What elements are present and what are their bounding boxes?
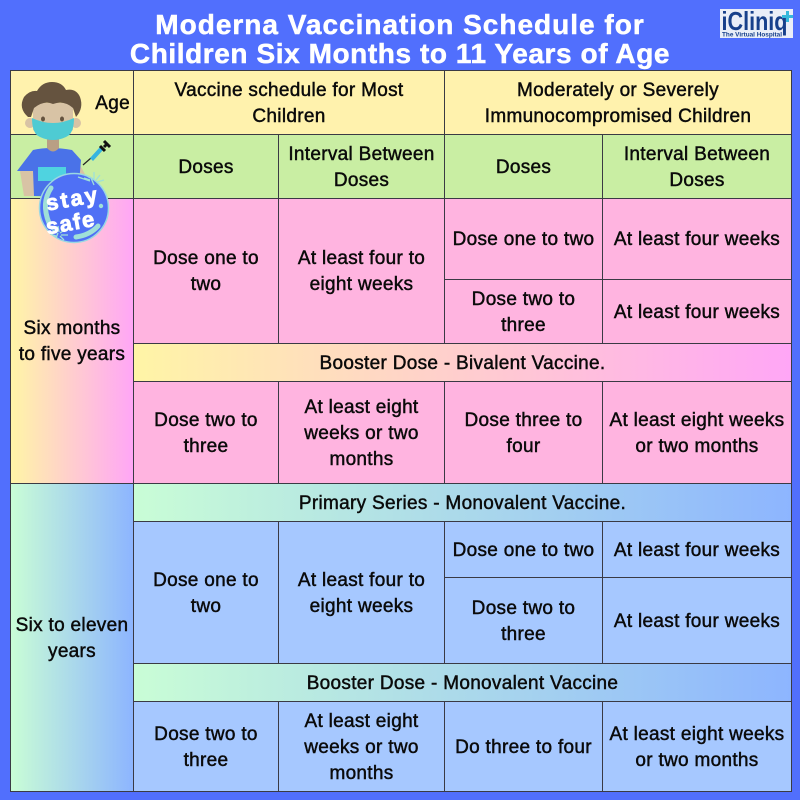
cell: eight weeks: At least eight weeks bbox=[610, 724, 784, 744]
age label: six months to five years: to five years bbox=[19, 344, 125, 365]
cell: eight weeks: weeks or two bbox=[304, 736, 419, 758]
cell: dose one to two: two bbox=[191, 596, 221, 616]
cell: eight weeks: weeks or two bbox=[304, 422, 419, 444]
cell: four to eight weeks bbox=[278, 521, 445, 664]
cell: eight weeks bbox=[602, 381, 792, 484]
cell: four weeks: At least four weeks bbox=[614, 610, 780, 632]
band: primary series: Primary Series - Monovalent Vaccine. bbox=[299, 492, 626, 514]
cell: dose one to two: two bbox=[191, 274, 221, 295]
age label: six months to five years: Six months bbox=[24, 318, 120, 339]
cell: dose two to three, immunocompromised bbox=[444, 279, 603, 344]
cell: dose one to two, immunocompromised: Dose one to two bbox=[453, 540, 594, 560]
header: most children bbox=[133, 70, 445, 135]
subheader: interval immunocompromised bbox=[602, 134, 792, 199]
cell: dose two to three, immunocompromised: Dose two to bbox=[472, 288, 575, 310]
header: age bbox=[10, 70, 134, 135]
cell: four to eight weeks: eight weeks bbox=[310, 596, 413, 616]
cell: eight weeks: or two months bbox=[635, 436, 759, 456]
age label: six months to five years bbox=[10, 198, 134, 484]
cell: four to eight weeks: eight weeks bbox=[310, 274, 413, 295]
cell: dose two to three: three bbox=[184, 750, 228, 770]
header: immunocompromised children bbox=[444, 70, 792, 135]
age label: six to eleven years bbox=[10, 483, 134, 792]
cell: dose three to four: four bbox=[507, 436, 540, 456]
cell: dose two to three: Dose two to bbox=[154, 724, 258, 744]
subheader: doses bbox=[133, 134, 279, 199]
cell: eight weeks: or two months bbox=[635, 750, 759, 770]
subheader: interval: Interval Between bbox=[288, 144, 435, 164]
cell: four weeks: At least four weeks bbox=[614, 302, 780, 322]
cell: four weeks: At least four weeks bbox=[614, 540, 780, 560]
cell: dose one to two: Dose one to bbox=[153, 248, 259, 269]
age label: six to eleven years: Six to eleven bbox=[16, 614, 128, 636]
cell: dose one to two, immunocompromised bbox=[444, 521, 603, 578]
icon: stay safe badge: safe bbox=[44, 206, 98, 239]
band: booster bivalent bbox=[133, 343, 792, 382]
cell: dose three to four: Dose three to bbox=[465, 410, 582, 430]
cell: dose two to three, immunocompromised: three bbox=[501, 314, 546, 336]
cell: eight weeks: months bbox=[329, 448, 394, 470]
band: primary series bbox=[133, 483, 792, 522]
cell: eight weeks bbox=[278, 381, 445, 484]
band: booster monovalent bbox=[133, 663, 792, 702]
cell: dose two to three, immunocompromised: three bbox=[501, 624, 546, 644]
icon: child bbox=[17, 82, 87, 197]
cell: four weeks bbox=[602, 577, 792, 664]
cell: eight weeks bbox=[278, 701, 445, 792]
cell: dose one to two: Dose one to bbox=[153, 570, 259, 590]
cell: dose two to three, immunocompromised: Dose two to bbox=[472, 598, 575, 618]
age label: six to eleven years: years bbox=[48, 640, 96, 662]
cell: do three to four bbox=[444, 701, 603, 792]
cell: eight weeks: At least eight bbox=[304, 710, 419, 732]
illustration: child with mask, syringe and stay safe badge bbox=[17, 82, 111, 244]
subheader: doses immunocompromised bbox=[444, 134, 603, 199]
subheader: interval bbox=[278, 134, 445, 199]
icon: stay safe badge bbox=[40, 172, 108, 242]
cell: dose two to three bbox=[133, 701, 279, 792]
subheader: interval immunocompromised: Doses bbox=[669, 170, 725, 190]
cell: four weeks: At least four weeks bbox=[614, 229, 780, 250]
cell: eight weeks: At least eight weeks bbox=[610, 410, 784, 430]
blank green header cell bbox=[10, 134, 134, 199]
cell: dose one to two, immunocompromised bbox=[444, 198, 603, 280]
band: booster bivalent: Booster Dose - Bivalent Vaccine. bbox=[320, 352, 605, 374]
band: booster monovalent: Booster Dose - Monovalent Vaccine bbox=[307, 672, 618, 694]
subheader: doses: Doses bbox=[178, 156, 234, 178]
header: most children: Children bbox=[252, 106, 326, 126]
icon: stay safe badge: stay bbox=[44, 182, 101, 216]
cell: four to eight weeks: At least four to bbox=[298, 570, 425, 590]
subheader: interval immunocompromised: Interval Between bbox=[624, 144, 770, 164]
cell: dose one to two, immunocompromised: Dose one to two bbox=[453, 229, 594, 250]
cell: four to eight weeks: At least four to bbox=[298, 248, 425, 269]
header: immunocompromised children: Immunocompromised Children bbox=[485, 106, 751, 126]
cell: eight weeks bbox=[602, 701, 792, 792]
icon: syringe bbox=[83, 141, 110, 165]
cell: dose two to three bbox=[133, 381, 279, 484]
title: Children Six Months to 11 Years of Age bbox=[130, 38, 670, 69]
cell: eight weeks: months bbox=[329, 762, 394, 784]
cell: four weeks bbox=[602, 521, 792, 578]
cell: dose two to three: Dose two to bbox=[154, 410, 258, 430]
cell: four weeks bbox=[602, 198, 792, 280]
cell: eight weeks: At least eight bbox=[304, 396, 419, 418]
cell: dose one to two bbox=[133, 198, 279, 344]
cell: dose one to two bbox=[133, 521, 279, 664]
header: age: Age bbox=[95, 92, 130, 114]
subheader: doses immunocompromised: Doses bbox=[496, 156, 551, 178]
cell: dose two to three: three bbox=[184, 436, 228, 456]
header: most children: Vaccine schedule for Most bbox=[175, 80, 403, 100]
title: Moderna Vaccination Schedule for bbox=[155, 9, 645, 40]
header: immunocompromised children: Moderately or Severely bbox=[517, 80, 719, 100]
cell: four to eight weeks bbox=[278, 198, 445, 344]
cell: four weeks bbox=[602, 279, 792, 344]
cell: do three to four: Do three to four bbox=[455, 736, 592, 758]
subheader: interval: Doses bbox=[334, 170, 389, 190]
cell: dose three to four bbox=[444, 381, 603, 484]
cell: dose two to three, immunocompromised bbox=[444, 577, 603, 664]
title bbox=[130, 9, 670, 70]
